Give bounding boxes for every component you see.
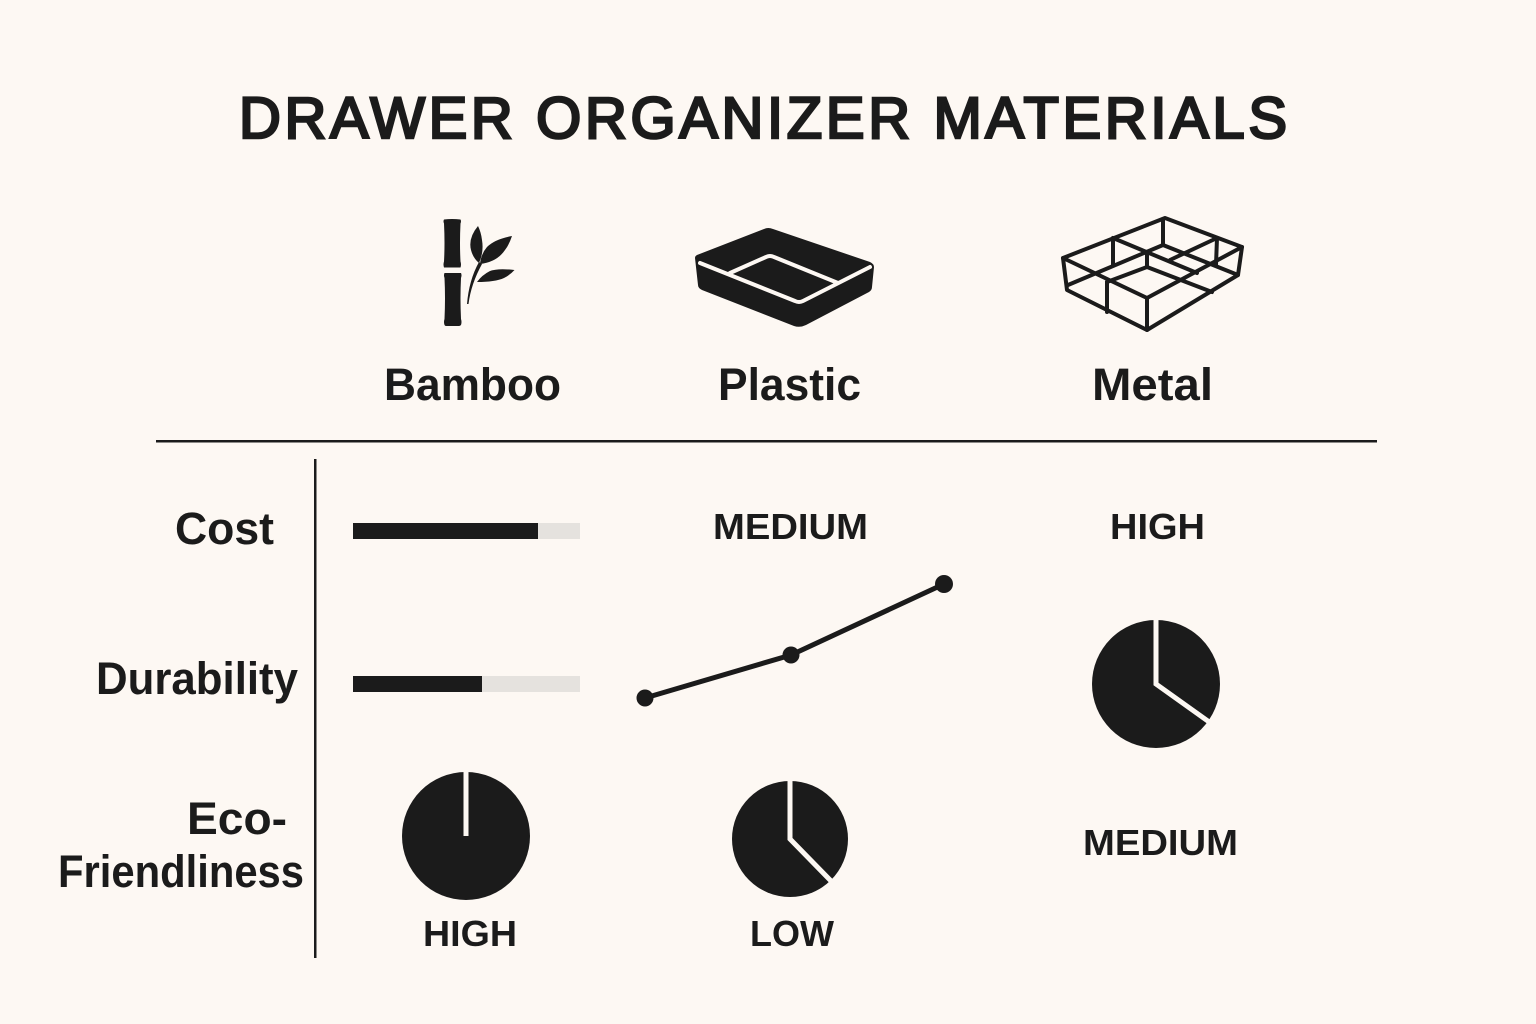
text: bamboo eco caption: HIGH [423,913,517,954]
title: DRAWER ORGANIZER MATERIALS [239,86,1287,151]
bar: bamboo durability [353,676,580,692]
label: Bamboo: Bamboo [384,359,561,410]
icon: metal organizer [1063,218,1242,330]
header divider [156,440,1377,442]
row label: Eco-Friendliness [58,793,304,897]
icon: bamboo [444,219,514,326]
row label: Durability: Durability [96,653,298,704]
row axis line [314,459,316,958]
bar: bamboo cost [353,523,580,539]
icon: plastic tray [695,228,874,327]
text: metal cost: HIGH [1110,506,1205,547]
label: Plastic: Plastic [718,359,861,410]
text: plastic cost: MEDIUM [713,506,868,547]
line chart: plastic durability [636,575,953,706]
row label: Eco-Friendliness: Eco- [187,793,287,844]
pie: plastic eco-friendliness [732,779,848,897]
row label: Cost: Cost [175,503,274,554]
pie: metal durability [1092,618,1220,748]
text: plastic eco caption: LOW [750,913,834,954]
label: Metal: Metal [1092,359,1213,410]
row label: Eco-Friendliness: Friendliness [58,846,304,897]
text: metal eco-friendliness: MEDIUM [1083,822,1238,863]
pie: bamboo eco-friendliness [402,770,530,900]
